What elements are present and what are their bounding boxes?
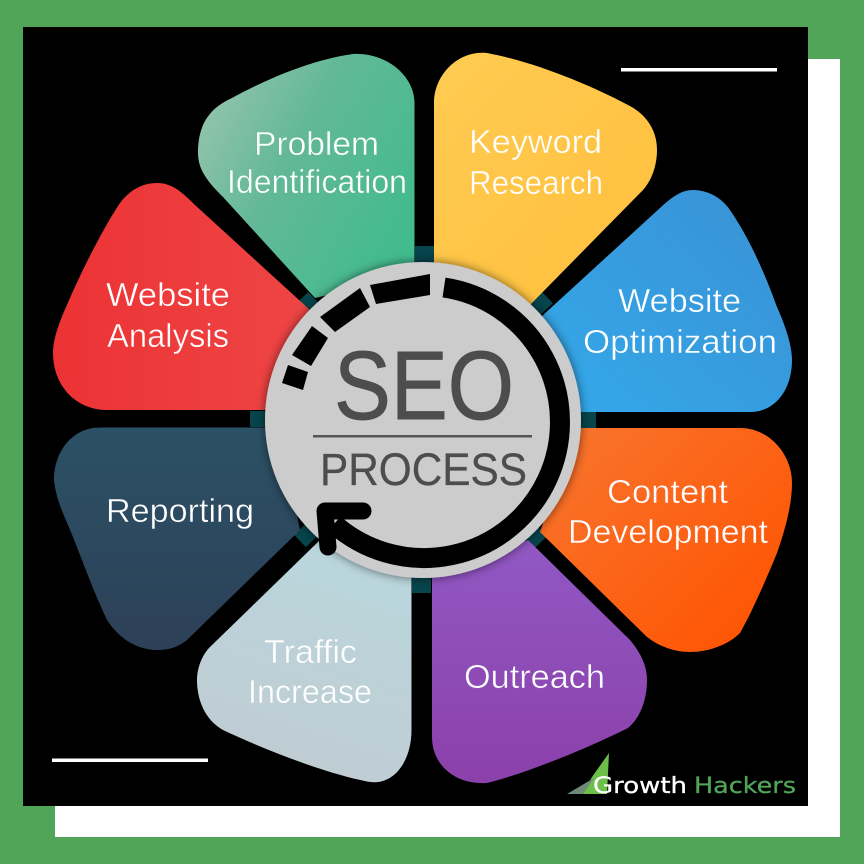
SEO heading: SEO xyxy=(334,331,514,440)
petal: Website Analysis: Website xyxy=(106,276,230,313)
top white line xyxy=(621,68,777,72)
petal: Website Analysis xyxy=(53,183,310,410)
dashed arrow tail xyxy=(282,274,430,390)
circular arrow xyxy=(325,288,560,558)
petal: Website Analysis: Analysis xyxy=(107,317,229,354)
logo: Growth Hackers: Hackers xyxy=(694,774,796,799)
petal: Traffic Increase: Increase xyxy=(248,673,372,710)
petal: Website Optimization: Optimization xyxy=(583,323,777,360)
petal: Problem Identification: Problem xyxy=(254,125,379,162)
center circle xyxy=(265,262,581,578)
petal: Website Optimization: Website xyxy=(618,282,741,319)
logo: Growth Hackers xyxy=(567,753,796,799)
petal: Content Development: Development xyxy=(568,513,768,550)
petal: Traffic Increase: Traffic xyxy=(264,633,357,670)
petal: Outreach: Outreach xyxy=(464,658,605,695)
petal: Problem Identification: Identification xyxy=(227,163,407,200)
teal gap connectors xyxy=(250,246,596,593)
petal: Keyword Research: Research xyxy=(469,164,603,201)
PROCESS subheading: PROCESS xyxy=(320,444,527,495)
petal: Keyword Research xyxy=(434,53,657,305)
divider xyxy=(313,435,532,438)
petal: Reporting xyxy=(54,428,300,650)
petal: Problem Identification xyxy=(198,54,414,298)
logo: Growth Hackers: Growth xyxy=(593,774,687,799)
bottom white line xyxy=(52,758,208,762)
petal: Website Optimization xyxy=(542,190,792,412)
petal: Content Development xyxy=(540,428,792,652)
petal: Content Development: Content xyxy=(607,473,728,510)
petal: Outreach xyxy=(432,540,647,783)
petal: Traffic Increase xyxy=(197,540,412,782)
petal: Keyword Research: Keyword xyxy=(469,123,602,160)
petal: Reporting: Reporting xyxy=(106,492,254,529)
